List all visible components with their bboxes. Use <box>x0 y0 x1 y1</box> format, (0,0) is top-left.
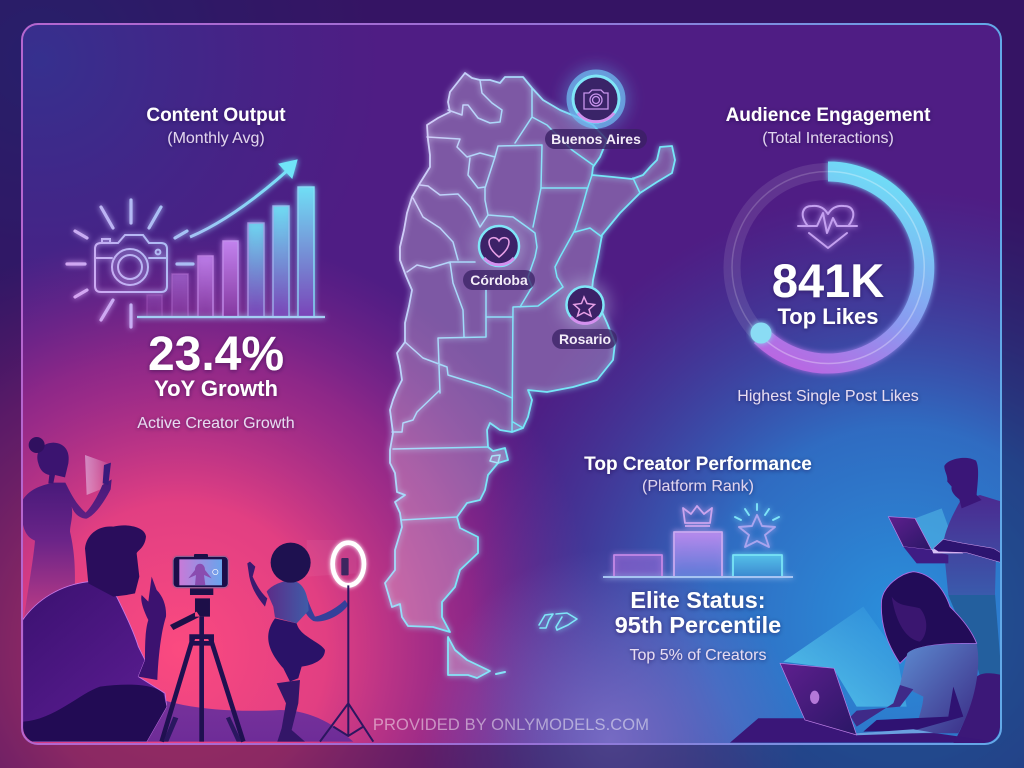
stat: 841K: 841K <box>772 254 884 307</box>
stat: elite status <box>615 587 781 638</box>
caption: top 5% of creators: Top 5% of Creators <box>630 647 766 664</box>
tripod camera <box>162 554 243 742</box>
illustration: right creators <box>730 458 1002 743</box>
heading: top creator performance: Top Creator Performance <box>584 454 812 475</box>
map mainland outline <box>385 73 675 632</box>
caption: active creator growth: Active Creator Growth <box>137 415 295 432</box>
icon: star with rays <box>735 504 779 547</box>
ground hill <box>147 700 354 742</box>
panel: audience engagement <box>726 105 931 405</box>
chart: growth bars with camera <box>67 160 325 327</box>
ring light <box>320 543 373 742</box>
map province borders <box>392 80 640 520</box>
pin: Rosario <box>561 281 609 329</box>
label: Cordoba <box>463 270 535 290</box>
dancing woman <box>247 540 373 742</box>
icon: crown <box>683 506 712 526</box>
pin: Buenos Aires <box>564 67 628 131</box>
icon: star <box>574 297 594 316</box>
label: Buenos Aires: Buenos Aires <box>551 131 641 147</box>
stat label: top likes: Top Likes <box>777 304 879 329</box>
icon: heart <box>489 238 509 257</box>
Tierra del Fuego <box>448 637 490 678</box>
map of Argentina <box>385 73 675 678</box>
stat: 23.4%: 23.4% <box>148 328 284 381</box>
Staten Island <box>496 672 505 674</box>
heading: audience engagement: (Total Interactions) <box>762 130 894 147</box>
stat: elite status: 95th Percentile <box>615 612 781 638</box>
Falkland Islands <box>539 613 577 630</box>
seated woman with laptop <box>730 572 1002 743</box>
crouching man <box>23 525 167 742</box>
panel: content output <box>67 105 325 432</box>
footer credit: PROVIDED BY ONLYMODELS.COM <box>373 716 649 734</box>
standing man with laptop <box>888 458 1002 677</box>
illustration: left creators <box>23 437 373 742</box>
stat: elite status: Elite Status: <box>630 587 766 613</box>
heading: audience engagement <box>726 105 931 147</box>
heading: content output: (Monthly Avg) <box>167 130 265 147</box>
caption: highest single post likes: Highest Single Post Likes <box>737 388 919 405</box>
icon: camera <box>584 90 608 109</box>
label: Rosario: Rosario <box>559 331 611 347</box>
icon: camera with flash rays <box>67 200 193 327</box>
heading: top creator performance: (Platform Rank) <box>642 478 754 495</box>
label: Cordoba: Córdoba <box>470 272 528 288</box>
arrow: growth <box>190 160 297 237</box>
heading: top creator performance <box>584 454 812 495</box>
chart: podium <box>603 504 793 577</box>
heading: content output <box>146 105 286 147</box>
chart: progress ring <box>732 171 924 364</box>
phone screen <box>179 559 222 585</box>
icon: heart with pulse <box>798 206 857 248</box>
panel: top creator performance <box>584 454 812 664</box>
pin: Cordoba <box>474 221 524 271</box>
Peninsula Valdes detail <box>490 455 500 463</box>
heading: audience engagement: Audience Engagement <box>726 105 931 126</box>
laptop <box>780 663 857 735</box>
standing woman with phone <box>23 437 112 618</box>
stat label: YoY Growth: YoY Growth <box>154 376 278 401</box>
label: Rosario <box>552 329 617 349</box>
heading: content output: Content Output <box>146 105 286 126</box>
